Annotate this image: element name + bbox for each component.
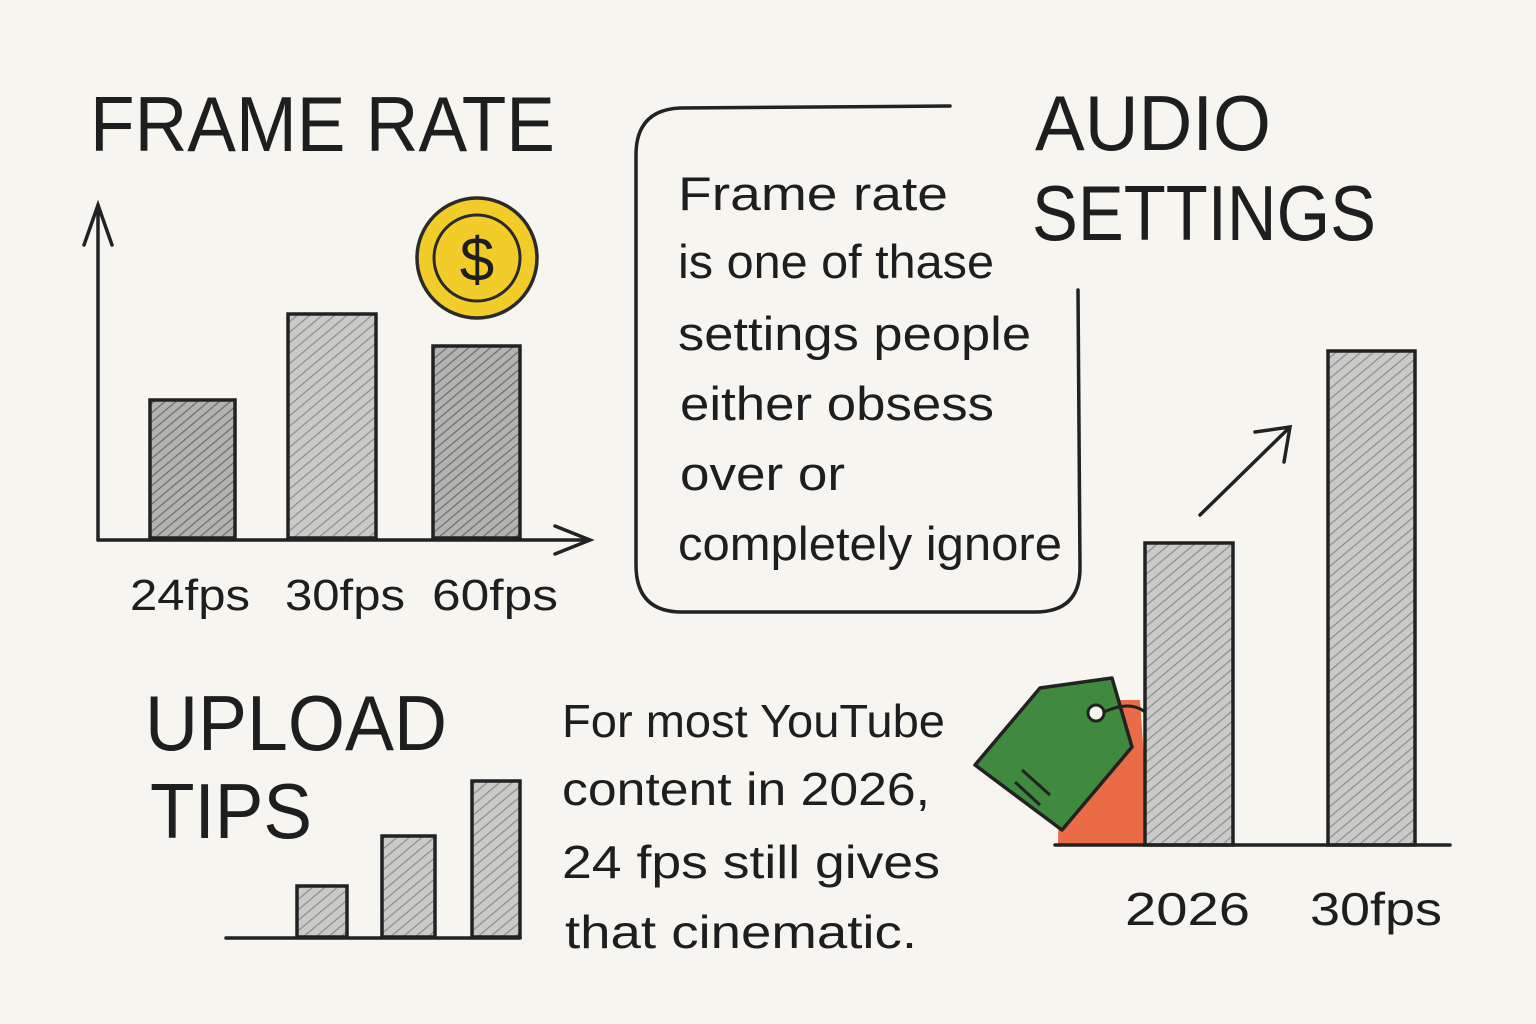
axis labels: fps: 60fps: [432, 571, 558, 620]
arrow: growth: [1200, 427, 1290, 515]
callout: frame rate quote: Frame rate: [678, 167, 948, 220]
icon: price tag: [975, 678, 1150, 845]
bar chart: frame rate: [84, 205, 590, 554]
title: upload tips: [145, 679, 447, 855]
icon: coin: $: [460, 226, 494, 295]
callout: frame rate quote: either obsess: [680, 377, 994, 430]
callout: frame rate quote: over or: [680, 447, 845, 500]
text block: youtube tip: 24 fps still gives: [562, 836, 940, 888]
text block: youtube tip: For most YouTube: [562, 695, 945, 747]
text block: youtube tip: content in 2026,: [562, 763, 930, 815]
title: audio settings: AUDIO: [1035, 79, 1271, 167]
callout: frame rate quote: is one of thase: [678, 235, 994, 288]
axis labels: fps: [130, 571, 558, 620]
title: frame rate: FRAME RATE: [90, 80, 555, 168]
axis labels: growth chart: 2026: [1125, 883, 1250, 935]
icon: coin: [417, 198, 537, 318]
bar chart: growth: [1055, 351, 1450, 845]
text block: youtube tip: that cinematic.: [565, 906, 917, 958]
axis labels: growth chart: 30fps: [1310, 883, 1442, 935]
callout: frame rate quote: settings people: [678, 307, 1031, 360]
title: upload tips: TIPS: [150, 767, 312, 855]
text block: youtube tip: [562, 695, 945, 958]
callout: frame rate quote: completely ignore: [678, 517, 1062, 570]
title: audio settings: [1032, 79, 1376, 257]
axis labels: fps: 24fps: [130, 571, 250, 620]
axis labels: fps: 30fps: [285, 571, 405, 620]
callout: frame rate quote: [636, 106, 1080, 612]
bar chart: upload tips: [226, 781, 520, 938]
title: upload tips: UPLOAD: [145, 679, 447, 767]
title: audio settings: SETTINGS: [1032, 169, 1376, 257]
axis labels: growth chart: [1125, 883, 1442, 935]
